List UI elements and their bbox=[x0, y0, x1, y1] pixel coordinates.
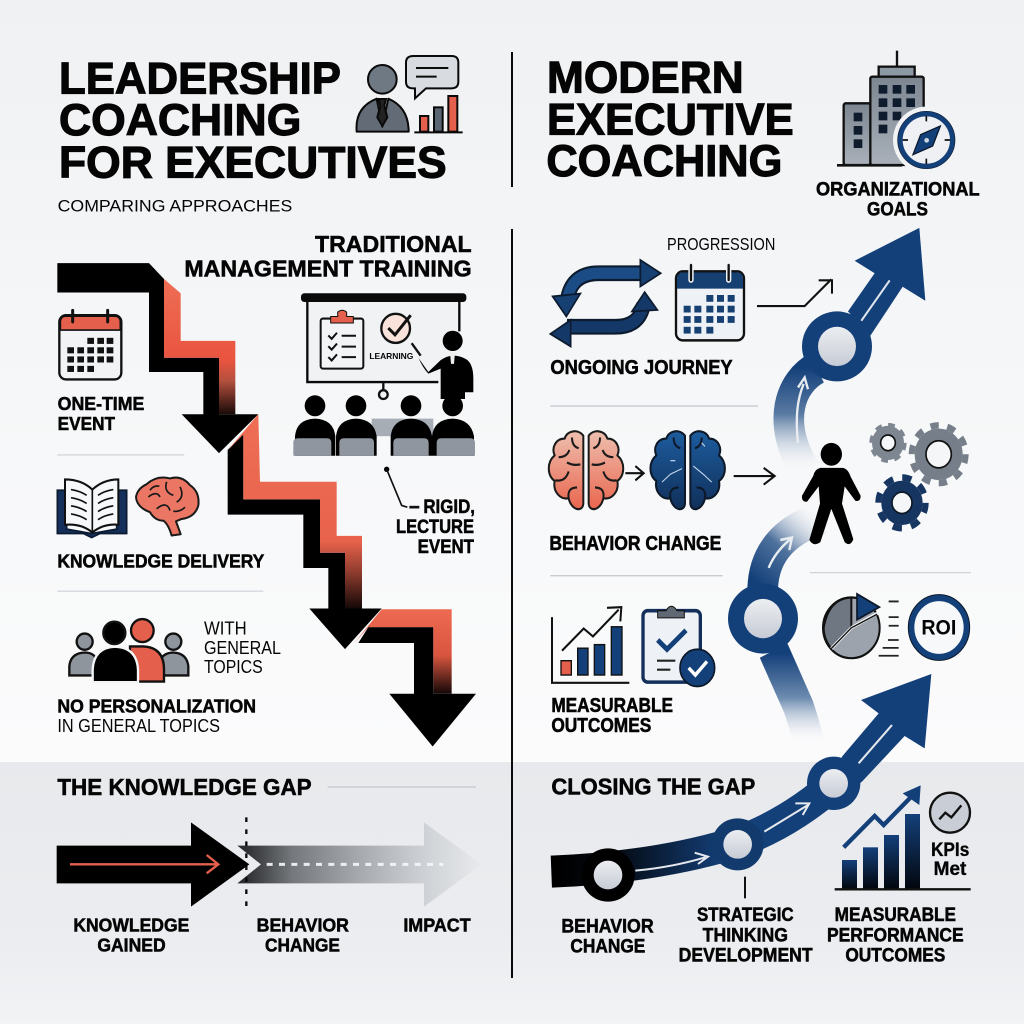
label: no personalization: IN GENERAL TOPICS bbox=[57, 716, 220, 736]
icon: executive with speech bubble and bars bbox=[356, 56, 463, 132]
heading: closing the gap: CLOSING THE GAP bbox=[551, 773, 755, 799]
subtitle: COMPARING APPROACHES bbox=[58, 197, 292, 216]
title: modern executive coaching: COACHING bbox=[546, 137, 782, 186]
icon: KPI met badge: Met bbox=[934, 859, 967, 880]
chart: descending staircase arrow bbox=[57, 263, 476, 746]
label: strategic thinking development: DEVELOPMENT bbox=[679, 946, 813, 967]
title: leadership coaching for executives: FOR EXECUTIVES bbox=[59, 139, 447, 188]
callout: rigid lecture event: EVENT bbox=[418, 536, 474, 558]
label: behavior change: CHANGE bbox=[570, 937, 645, 958]
road: closing the gap arrow bbox=[551, 674, 931, 902]
icon: open book bbox=[57, 479, 127, 538]
icon: lecture presentation bbox=[293, 293, 475, 456]
label: knowledge delivery: KNOWLEDGE DELIVERY bbox=[57, 550, 265, 571]
arrow: knowledge gained bbox=[57, 822, 249, 907]
label: behavior change bbox=[561, 917, 654, 958]
icon: clipboard with check bbox=[643, 606, 715, 686]
icon: calendar bbox=[59, 310, 121, 379]
label: measurable performance outcomes: MEASURABLE bbox=[835, 905, 956, 926]
bottom band background bbox=[0, 762, 1024, 1024]
label: organizational goals bbox=[816, 180, 980, 221]
label: behavior change: BEHAVIOR bbox=[561, 917, 654, 938]
arrow: brain to brain bbox=[625, 466, 644, 480]
heading bbox=[184, 231, 472, 282]
icon: pie chart bbox=[823, 594, 899, 658]
icon: person bbox=[802, 443, 861, 544]
icon: ROI badge bbox=[908, 595, 970, 660]
label: ongoing journey: ONGOING JOURNEY bbox=[550, 356, 733, 379]
tick mark bbox=[744, 877, 746, 898]
label: measurable performance outcomes: PERFORMANCE bbox=[827, 926, 964, 947]
labels: knowledge gained, behavior change, impact: CHANGE bbox=[265, 935, 340, 956]
icon: gears bbox=[871, 425, 966, 528]
panel: the knowledge gap bbox=[57, 774, 482, 956]
title: leadership coaching for executives bbox=[59, 54, 447, 188]
icon: blue brain bbox=[650, 431, 725, 509]
icon: brain bbox=[136, 478, 199, 536]
label: measurable performance outcomes: OUTCOMES bbox=[845, 946, 945, 967]
icon: building with compass bbox=[837, 51, 960, 173]
title: leadership coaching for executives: COACHING bbox=[59, 96, 301, 145]
text: with general topics: TOPICS bbox=[204, 657, 263, 677]
labels: knowledge gained, behavior change, impact: GAINED bbox=[97, 935, 166, 956]
icon: ROI badge: ROI bbox=[921, 616, 956, 640]
title: leadership coaching for executives: LEADERSHIP bbox=[59, 54, 341, 103]
label: measurable outcomes bbox=[551, 694, 673, 737]
label: one-time event: ONE-TIME bbox=[58, 393, 144, 414]
panel: traditional management training bbox=[57, 231, 476, 746]
arrow: callout pointer bbox=[384, 467, 419, 507]
icon: calendar bbox=[676, 265, 744, 340]
label: one-time event: EVENT bbox=[58, 413, 116, 434]
labels: knowledge gained, behavior change, impact: BEHAVIOR bbox=[257, 915, 349, 936]
callout: rigid lecture event: RIGID, bbox=[423, 496, 475, 518]
title: modern executive coaching bbox=[546, 54, 794, 186]
heading: the knowledge gap: THE KNOWLEDGE GAP bbox=[57, 774, 312, 800]
label: behavior change: BEHAVIOR CHANGE bbox=[549, 532, 721, 555]
label: measurable outcomes: MEASURABLE bbox=[551, 694, 673, 717]
icon: lecture presentation: LEARNING bbox=[369, 351, 413, 361]
chart: KPI bars with trend bbox=[835, 785, 971, 889]
callout: rigid lecture event: LECTURE bbox=[396, 516, 474, 538]
arrow: brain to person bbox=[734, 468, 775, 485]
panel: left header bbox=[58, 54, 463, 216]
title: modern executive coaching: EXECUTIVE bbox=[547, 95, 794, 144]
callout: rigid lecture event bbox=[396, 496, 475, 558]
icon: group of people bbox=[69, 619, 188, 682]
label: organizational goals: GOALS bbox=[867, 200, 928, 221]
center divider lower bbox=[511, 229, 513, 978]
labels: knowledge gained, behavior change, impact bbox=[73, 915, 471, 956]
icon: pink brain bbox=[549, 431, 623, 509]
labels: knowledge gained, behavior change, impact: KNOWLEDGE bbox=[73, 915, 189, 936]
icon: KPI met badge bbox=[930, 793, 970, 880]
chart: rising bars bbox=[552, 607, 629, 683]
text: with general topics bbox=[204, 618, 281, 677]
text: with general topics: WITH bbox=[204, 618, 247, 639]
labels: knowledge gained, behavior change, impact: IMPACT bbox=[403, 915, 471, 936]
label: progression: PROGRESSION bbox=[667, 234, 775, 254]
label: strategic thinking development: THINKING bbox=[703, 926, 788, 947]
title: modern executive coaching: MODERN bbox=[547, 54, 744, 103]
label: strategic thinking development: STRATEGIC bbox=[697, 905, 794, 926]
center divider upper bbox=[511, 52, 513, 187]
panel: modern coaching journey bbox=[549, 228, 971, 745]
label: strategic thinking development bbox=[679, 905, 813, 967]
text: with general topics: GENERAL bbox=[204, 638, 281, 658]
arrow: calendar to path bbox=[757, 279, 832, 306]
label: one-time event bbox=[58, 393, 144, 434]
icon: KPI met badge: KPIs bbox=[931, 840, 969, 861]
heading: MANAGEMENT TRAINING bbox=[184, 255, 472, 282]
icon: cycle arrows bbox=[550, 260, 661, 346]
road: rising journey path bbox=[728, 228, 925, 745]
panel: closing the gap bbox=[551, 674, 971, 967]
gap marker dashed line bbox=[243, 817, 250, 912]
label: organizational goals: ORGANIZATIONAL bbox=[816, 180, 980, 201]
heading: TRADITIONAL bbox=[315, 231, 472, 257]
label: no personalization: NO PERSONALIZATION bbox=[57, 696, 256, 717]
panel: right header bbox=[546, 51, 980, 221]
label: measurable performance outcomes bbox=[827, 905, 964, 967]
label: measurable outcomes: OUTCOMES bbox=[551, 715, 651, 737]
label: no personalization bbox=[57, 696, 256, 736]
arrow: fading behavior arrow bbox=[237, 822, 482, 907]
